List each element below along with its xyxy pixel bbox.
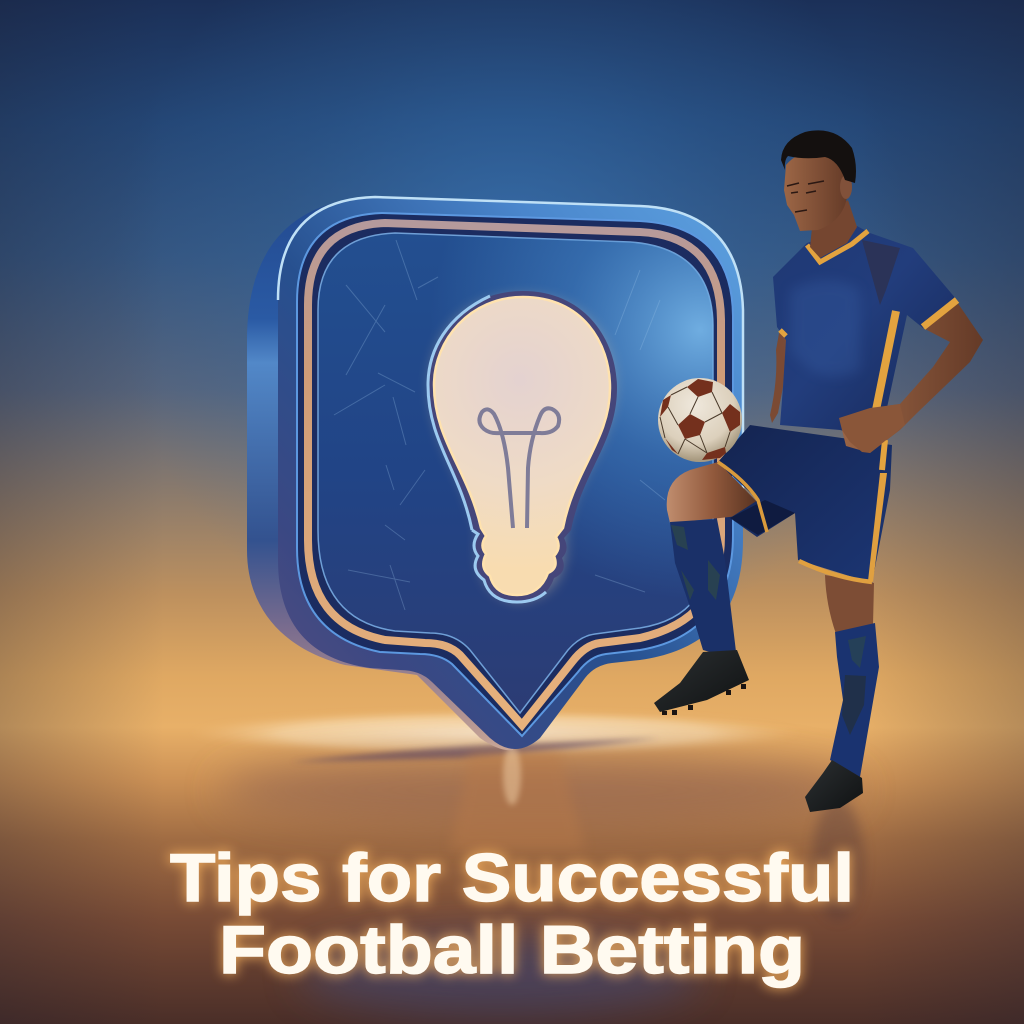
player hand: [839, 404, 905, 453]
player raised sock: [670, 519, 737, 660]
player neck and head: [810, 200, 857, 258]
speech bubble icon: [247, 197, 743, 750]
player standing leg: [825, 575, 874, 634]
title: [170, 840, 854, 988]
bubble front plate: [278, 197, 743, 749]
bubble gold rim: [308, 223, 721, 725]
floor light pool and reflections: [190, 710, 864, 1015]
football player: [654, 130, 983, 812]
bubble extruded side: [247, 197, 560, 750]
scratch marks: [334, 240, 665, 610]
bubble blue inner line: [297, 213, 733, 736]
light bulb: [428, 291, 617, 602]
player right arm: [839, 302, 983, 453]
player standing boot: [805, 760, 863, 812]
bubble front face: [318, 233, 713, 713]
player standing sock: [830, 623, 879, 777]
title text: Football Betting: [219, 912, 805, 988]
player hair: [781, 130, 856, 183]
title text: [170, 840, 854, 988]
title glow: Tips for Successful: [170, 840, 854, 916]
light bulb glow: [430, 295, 615, 602]
player left arm: [770, 328, 787, 423]
player raised boot: [654, 650, 749, 712]
title text: Tips for Successful: [170, 840, 854, 916]
football: [658, 378, 742, 462]
title glow: [170, 840, 854, 988]
player jersey: [773, 226, 957, 440]
player shorts: [718, 425, 892, 583]
jersey highlights: [790, 280, 860, 377]
player raised thigh and knee: [667, 462, 760, 523]
title glow: Football Betting: [219, 912, 805, 988]
bulb filament: [479, 408, 559, 528]
